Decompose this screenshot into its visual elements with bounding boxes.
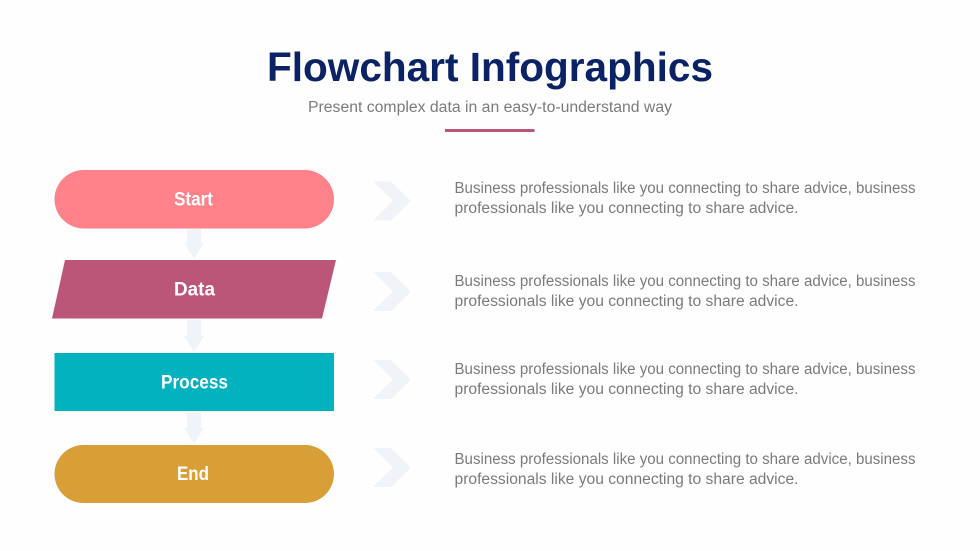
description: row 2: Business professionals like you connecting to share advice, business — [454, 273, 916, 290]
flowchart node: start — [54, 170, 334, 228]
subtitle: Present complex data in an easy-to-understand way — [308, 99, 672, 116]
flowchart node: end: End — [177, 464, 209, 485]
flowchart node: process — [54, 353, 334, 411]
description: row 4: professionals like you connecting to share advice. — [454, 471, 798, 488]
description: row 4 — [454, 451, 916, 488]
description: row 3 — [454, 361, 916, 398]
flowchart node: start: Start — [174, 190, 214, 210]
description: row 2 — [454, 273, 916, 310]
title: Flowchart Infographics — [267, 44, 713, 90]
flowchart node: data: Data — [174, 280, 215, 300]
chevron: row 1 — [373, 182, 411, 220]
arrow: start to data — [184, 229, 204, 259]
arrow: process to end — [184, 413, 204, 444]
chevron: row 4 — [373, 448, 411, 487]
chevron: row 2 — [373, 272, 411, 311]
flowchart node: data — [52, 260, 336, 318]
flowchart node: process: Process — [161, 372, 228, 394]
flowchart node: end — [54, 445, 334, 503]
description: row 4: Business professionals like you connecting to share advice, business — [454, 451, 916, 468]
arrow: data to process — [184, 320, 204, 352]
description: row 3: professionals like you connecting to share advice. — [454, 381, 798, 398]
description: row 3: Business professionals like you connecting to share advice, business — [454, 361, 916, 378]
description: row 1 — [454, 180, 916, 217]
description: row 2: professionals like you connecting to share advice. — [454, 293, 798, 310]
chevron: row 3 — [373, 360, 411, 399]
description: row 1: Business professionals like you connecting to share advice, business — [454, 180, 916, 197]
description: row 1: professionals like you connecting to share advice. — [454, 200, 798, 217]
title accent rule — [445, 129, 534, 132]
